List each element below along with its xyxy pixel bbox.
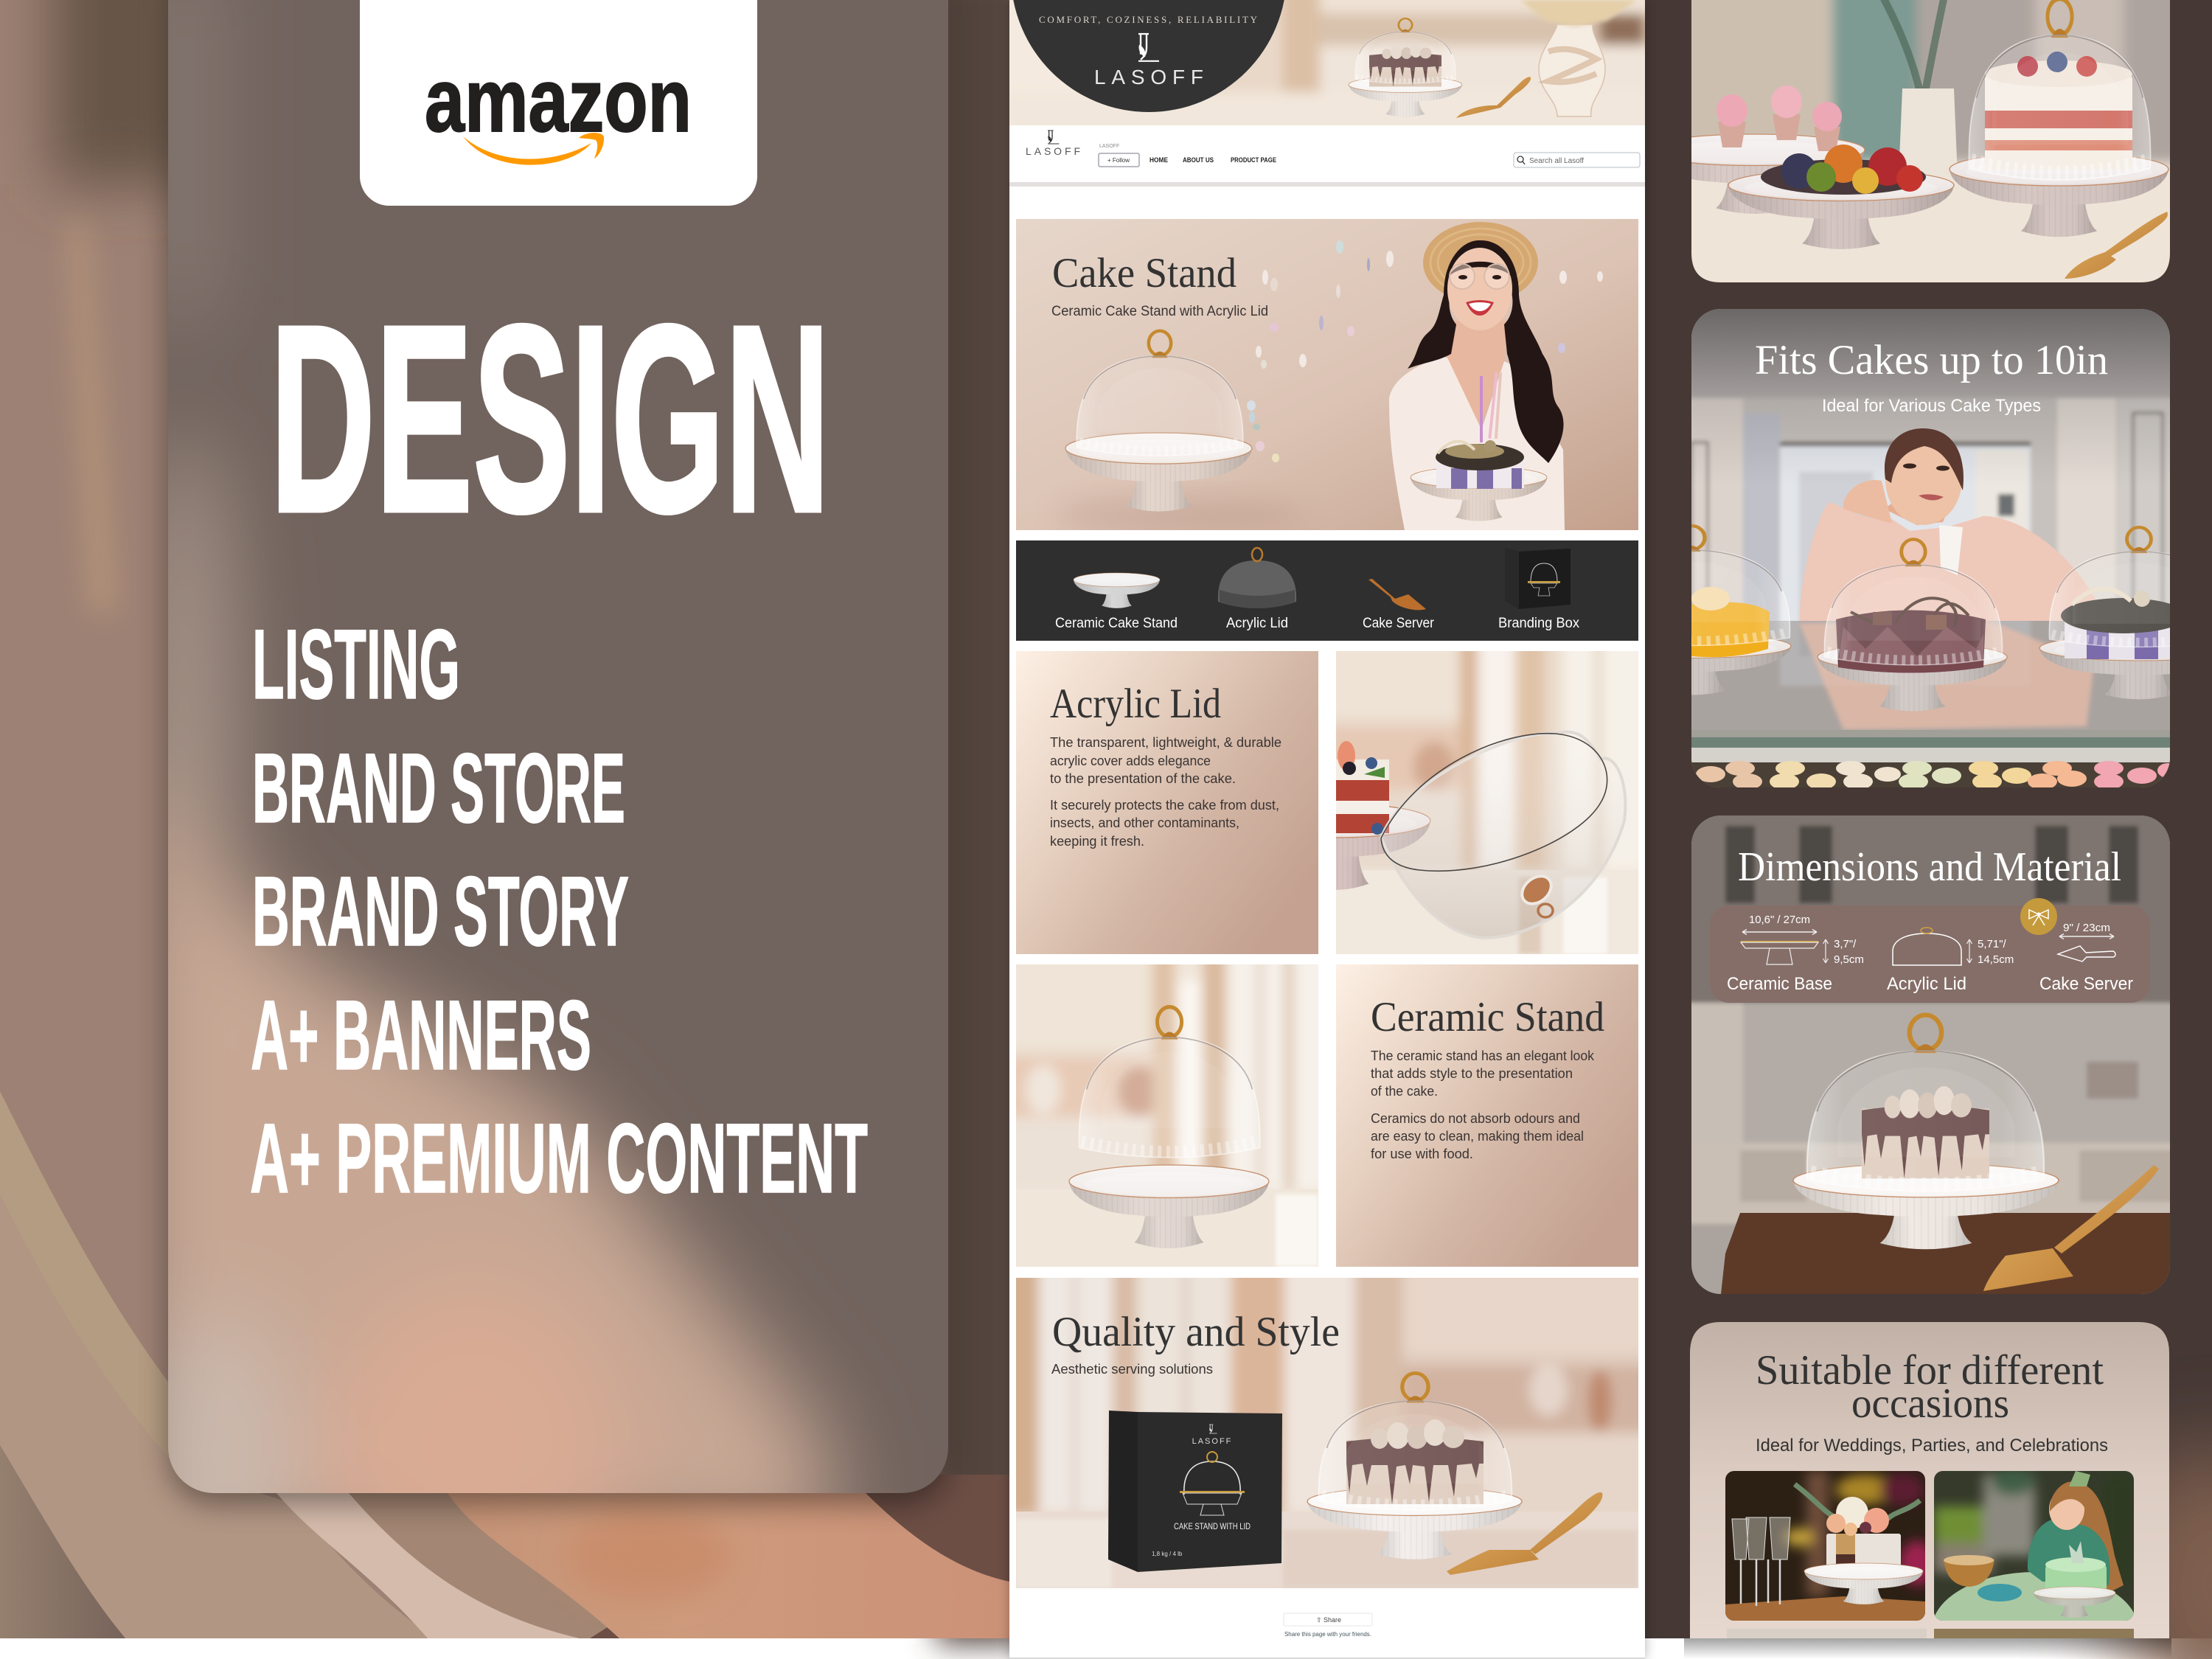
nav links: HOME bbox=[1150, 156, 1168, 164]
subheading: Ideal for Various Cake Types bbox=[1822, 396, 2041, 416]
heading: Fits Cakes up to 10in bbox=[1755, 337, 2108, 383]
heading: Dimensions and Material bbox=[1738, 844, 2121, 890]
follow button: + Follow bbox=[1107, 157, 1130, 164]
center brand store page bbox=[995, 0, 1659, 1659]
panel: acrylic lid text bbox=[1016, 651, 1318, 954]
dimension: ceramic base: Ceramic Base bbox=[1727, 974, 1832, 994]
cake server bbox=[1456, 77, 1531, 118]
dimension: ceramic base: 9,5cm bbox=[1834, 953, 1864, 966]
photo: girl's birthday bbox=[1932, 1469, 2138, 1659]
macarons row bbox=[1691, 761, 2178, 790]
share button bbox=[1284, 1613, 1372, 1626]
gold cake server bbox=[2065, 212, 2168, 279]
background: silk drapes bbox=[0, 0, 1025, 1644]
service list bbox=[250, 610, 868, 1214]
body text: Ceramics do not absorb odours and bbox=[1371, 1111, 1580, 1126]
nav links: ABOUT US bbox=[1183, 156, 1214, 164]
product strip bbox=[1016, 540, 1638, 641]
amazon smile arrow bbox=[463, 133, 604, 165]
body text: that adds style to the presentation bbox=[1371, 1066, 1573, 1081]
plant and vase bbox=[1877, 0, 1958, 177]
woman in pink jacket bbox=[1800, 428, 2098, 621]
vase and dried flowers bbox=[1520, 0, 1637, 116]
left dome with yellow cake bbox=[1592, 526, 1791, 695]
left stand with cupcakes bbox=[1644, 86, 1865, 214]
dimension: ceramic base: 10,6" / 27cm bbox=[1749, 914, 1810, 926]
kitchen background bbox=[1691, 815, 2170, 1294]
item: listing: LISTING bbox=[252, 610, 460, 720]
center stand with fruit bbox=[1728, 145, 1954, 249]
panel: acrylic lid photo bbox=[1242, 634, 1644, 954]
panel: ceramic stand text bbox=[1336, 964, 1638, 1267]
hero panel: cake stand bbox=[1016, 219, 1638, 534]
body text bbox=[1050, 735, 1281, 849]
brand label: LASOFF bbox=[1099, 144, 1119, 149]
background: dark right side bbox=[1645, 0, 2212, 1659]
body text: to the presentation of the cake. bbox=[1050, 771, 1236, 786]
left glass panel bbox=[125, 0, 948, 1637]
item: acrylic lid: Acrylic Lid bbox=[1226, 616, 1288, 631]
stand with red velvet cake bbox=[1242, 741, 1430, 890]
shadow below cards bbox=[1684, 1638, 2171, 1659]
nav logo: LASOFF bbox=[1026, 145, 1080, 157]
heading: Ceramic Stand bbox=[1371, 994, 1604, 1040]
body text: acrylic cover adds elegance bbox=[1050, 754, 1211, 768]
LASOFF wordmark: LASOFF bbox=[1094, 66, 1203, 88]
branded box: CAKE STAND WITH LID bbox=[1174, 1521, 1251, 1531]
photo: wedding cake bbox=[1725, 1471, 1935, 1621]
follow button bbox=[1099, 153, 1139, 167]
dark logo circle bbox=[1011, 0, 1287, 112]
body text: for use with food. bbox=[1371, 1147, 1473, 1161]
item: branding box bbox=[1498, 548, 1579, 631]
L monogram bbox=[1138, 34, 1159, 61]
item: brand store: BRAND STORE bbox=[252, 734, 625, 844]
item: brand story: BRAND STORY bbox=[252, 857, 629, 967]
card 3: dimensions and material bbox=[1681, 804, 2183, 1294]
body text: are easy to clean, making them ideal bbox=[1371, 1129, 1584, 1144]
nav links bbox=[1150, 156, 1276, 164]
panel: quality and style bbox=[1003, 1261, 1654, 1588]
amazon wordmark: amazon bbox=[425, 50, 692, 150]
title: DESIGN: DESIGN bbox=[270, 269, 830, 568]
branded box bbox=[1108, 1411, 1282, 1572]
floating dome and stand bbox=[1069, 1007, 1269, 1248]
heading: Acrylic Lid bbox=[1050, 681, 1221, 727]
nav links: PRODUCT PAGE bbox=[1231, 156, 1276, 164]
wooden counter bbox=[1721, 1213, 2170, 1294]
dimension: ceramic base bbox=[1727, 914, 1864, 994]
search box: Search all Lasoff bbox=[1529, 157, 1584, 165]
heading: occasions bbox=[1851, 1380, 2009, 1427]
heading: Suitable for different bbox=[1756, 1347, 2104, 1394]
next photo row (cropped) bbox=[1727, 1629, 2134, 1638]
heading: Cake Stand bbox=[1052, 250, 1237, 296]
card 2: fits cakes up to 10in bbox=[1592, 299, 2212, 790]
right stand with cake and dome bbox=[1950, 0, 2168, 237]
item: cake server bbox=[1363, 579, 1435, 631]
body text: It securely protects the cake from dust, bbox=[1050, 798, 1279, 813]
counter reflection and glass bbox=[1691, 621, 2170, 762]
dimensions panel bbox=[1710, 898, 2150, 1003]
dimension: cake server bbox=[2039, 922, 2133, 994]
item: branding box: Branding Box bbox=[1498, 616, 1579, 631]
stand with cake and dome bbox=[1793, 1015, 2059, 1249]
product: stand with dome bbox=[1065, 331, 1252, 512]
store navigation bbox=[1026, 131, 1640, 167]
dimension: acrylic lid: 14,5cm bbox=[1978, 953, 2014, 966]
dimension: cake server: 9" / 23cm bbox=[2063, 922, 2110, 934]
cake server bbox=[1447, 1492, 1602, 1575]
branded box: LASOFF bbox=[1192, 1437, 1232, 1446]
item: a+ banners: A+ BANNERS bbox=[251, 981, 591, 1091]
item: ceramic cake stand: Ceramic Cake Stand bbox=[1055, 616, 1178, 631]
search box bbox=[1514, 153, 1640, 167]
body text: of the cake. bbox=[1371, 1084, 1438, 1099]
confetti bbox=[1247, 240, 1603, 462]
right dome with striped cake bbox=[2039, 527, 2212, 699]
heading: Quality and Style bbox=[1052, 1309, 1340, 1355]
body text: keeping it fresh. bbox=[1050, 834, 1144, 849]
dimension: ceramic base: 3,7"/ bbox=[1834, 938, 1857, 950]
amazon logo card bbox=[360, 0, 757, 206]
tagline: COMFORT, COZINESS, RELIABILITY bbox=[1039, 14, 1258, 25]
tilted acrylic lid bbox=[1381, 732, 1625, 938]
share button: ⇧ Share bbox=[1316, 1616, 1341, 1624]
dimension: acrylic lid: Acrylic Lid bbox=[1887, 974, 1966, 994]
subheading: Ceramic Cake Stand with Acrylic Lid bbox=[1051, 304, 1268, 319]
item: a+ premium content: A+ PREMIUM CONTENT bbox=[250, 1104, 868, 1214]
dimension: acrylic lid bbox=[1887, 928, 2014, 994]
dimension: cake server: Cake Server bbox=[2039, 974, 2133, 994]
cake stand in banner bbox=[1349, 18, 1462, 117]
share caption: Share this page with your friends. bbox=[1284, 1631, 1371, 1638]
gold cake server bbox=[1983, 1165, 2159, 1291]
body text bbox=[1371, 1048, 1595, 1161]
shop interior bbox=[1691, 309, 2170, 787]
stand with chocolate drip cake bbox=[1307, 1373, 1522, 1559]
body text: The transparent, lightweight, & durable bbox=[1050, 735, 1281, 750]
nav logo bbox=[1026, 131, 1080, 157]
card 4: suitable for different occasions bbox=[1690, 1322, 2169, 1659]
gold gift badge bbox=[2020, 898, 2057, 935]
heading bbox=[1756, 1347, 2104, 1427]
brand banner bbox=[1009, 0, 1645, 125]
item: acrylic lid bbox=[1218, 548, 1296, 631]
woman holding cake bbox=[1389, 222, 1565, 530]
subheading: Aesthetic serving solutions bbox=[1051, 1362, 1213, 1377]
subheading: Ideal for Weddings, Parties, and Celebrations bbox=[1756, 1436, 2108, 1455]
center dome with chocolate cake bbox=[1818, 539, 2007, 711]
body text: The ceramic stand has an elegant look bbox=[1371, 1048, 1595, 1063]
panel: ceramic stand photo bbox=[995, 947, 1333, 1267]
branded box: 1,8 kg / 4 lb bbox=[1152, 1551, 1183, 1557]
dimension: acrylic lid: 5,71"/ bbox=[1978, 938, 2007, 950]
card 1: fruit and cake stands bbox=[1644, 0, 2183, 282]
item: cake server: Cake Server bbox=[1363, 616, 1435, 631]
item: ceramic cake stand bbox=[1055, 573, 1178, 631]
body text: insects, and other contaminants, bbox=[1050, 815, 1239, 830]
